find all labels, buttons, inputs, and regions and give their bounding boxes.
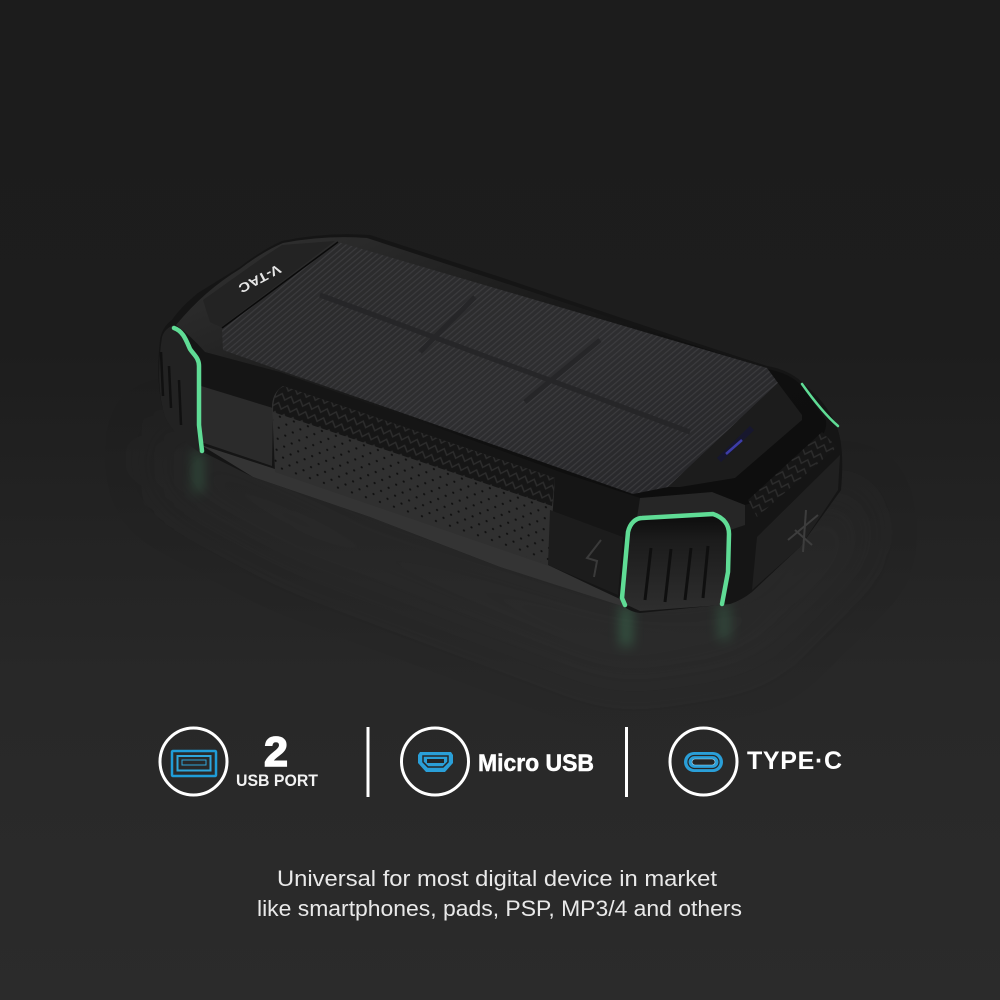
front cap ribs (645, 546, 708, 602)
port door with lightning icon (548, 510, 623, 595)
solar panel (222, 242, 778, 494)
description text: Universal for most digital device in market (277, 866, 717, 891)
left cap ribs (161, 352, 181, 425)
icon: USB Type-C port (670, 728, 737, 795)
highlight above front cap (637, 492, 745, 530)
logo plate (203, 241, 335, 327)
label: TYPE·C (747, 747, 842, 775)
feature: Type-C (670, 728, 842, 795)
device silhouette (158, 234, 842, 613)
features row (160, 727, 842, 797)
feature: USB port (160, 728, 319, 795)
feature: Micro USB (402, 728, 594, 795)
divider (625, 727, 628, 797)
textured end plate with LED indicators (668, 383, 802, 487)
description text: like smartphones, pads, PSP, MP3/4 and others (257, 896, 742, 921)
label: USB PORT (236, 771, 319, 790)
right carbon band (748, 432, 837, 517)
side grip (272, 386, 555, 566)
power bank product photo (158, 234, 842, 613)
usb symbol (788, 510, 818, 552)
green accents (174, 328, 838, 605)
front corner cap (623, 514, 729, 611)
brand logo: V-TAC (235, 261, 284, 297)
left side panel (201, 386, 273, 466)
label: Micro USB (478, 750, 594, 777)
floor reflection of the power bank (165, 430, 860, 670)
top face (176, 237, 826, 505)
description text (257, 866, 742, 921)
divider (366, 727, 370, 797)
icon: USB A port (160, 728, 227, 795)
right side face (752, 455, 840, 590)
left end cap (159, 325, 199, 452)
count: 2 (264, 728, 288, 775)
icon: Micro USB port (402, 728, 468, 795)
bottom base strip (201, 445, 625, 607)
carbon band (273, 386, 555, 506)
